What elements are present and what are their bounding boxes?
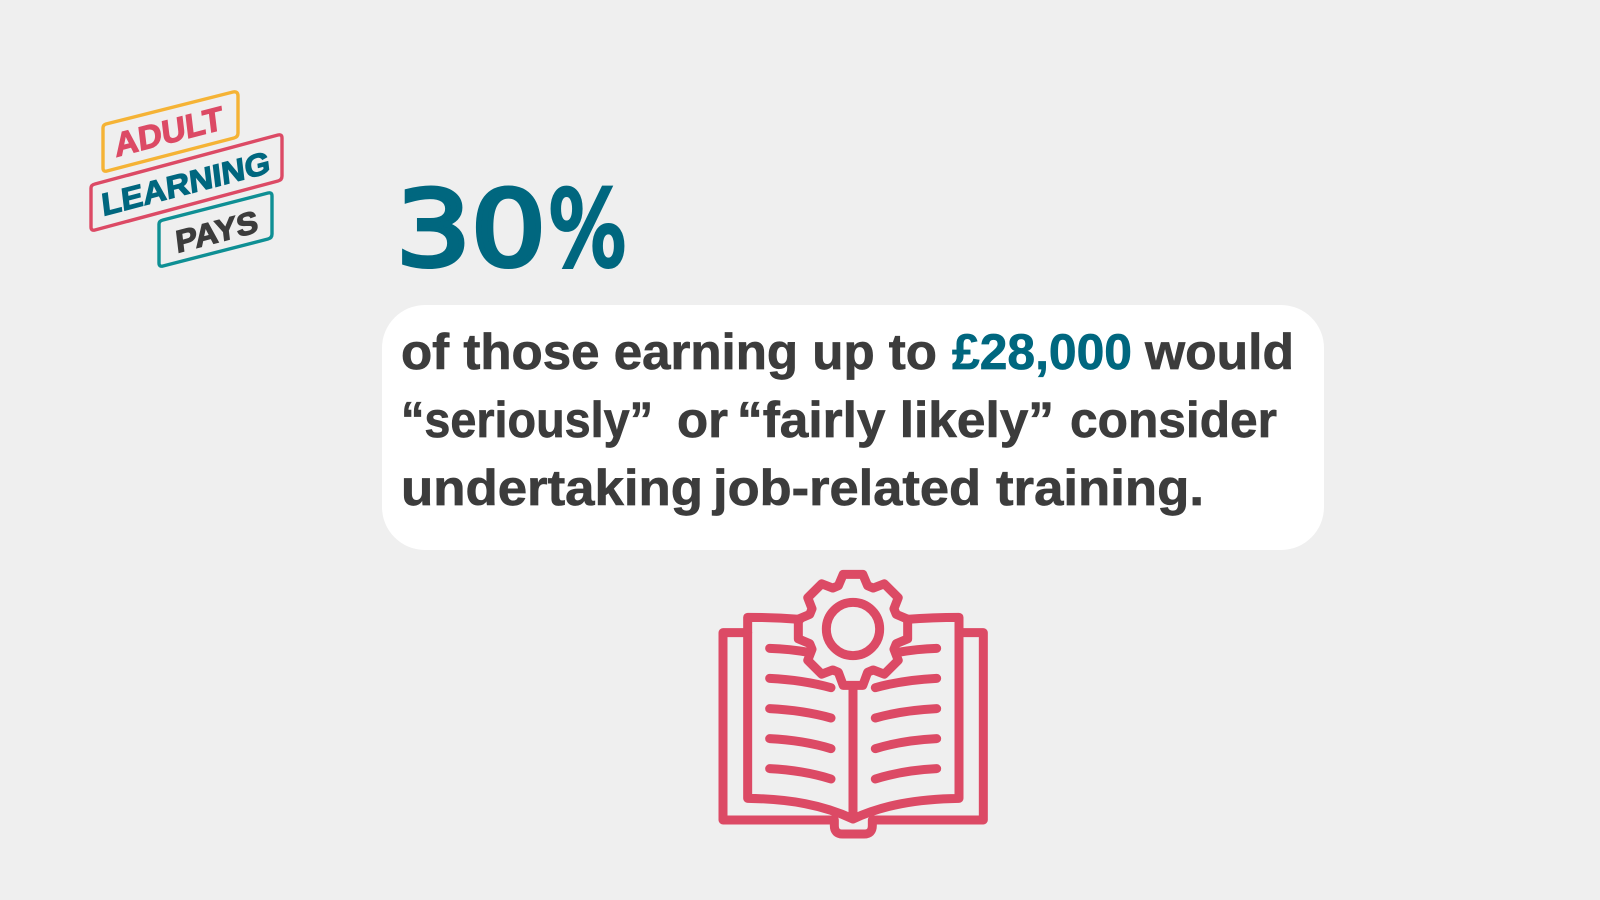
book spine <box>839 686 866 818</box>
description text: “fairly likely” <box>737 392 1054 448</box>
description text <box>401 324 1294 516</box>
description text: undertaking <box>401 460 703 516</box>
description text: or <box>677 392 728 448</box>
logo text: adult: ADULT <box>113 100 225 165</box>
logo: Adult Learning Pays <box>91 92 282 266</box>
description text: consider <box>1070 392 1277 448</box>
description text: would <box>1144 324 1294 380</box>
book cover <box>723 633 983 834</box>
description text: training. <box>996 460 1204 516</box>
panel: description <box>382 305 1324 550</box>
text lines on left page <box>770 648 831 779</box>
headline statistic: 30%: 30 <box>396 170 546 290</box>
description text: £28,000 <box>952 324 1132 380</box>
text lines on right page <box>875 648 937 779</box>
logo box: adult <box>103 92 238 171</box>
logo box: learning <box>91 135 282 230</box>
gear <box>798 574 908 685</box>
logo box: pays <box>159 193 272 266</box>
description text: “seriously” <box>401 392 653 448</box>
headline statistic: 30%: % <box>548 170 627 290</box>
headline statistic: 30% <box>396 170 627 290</box>
description text: of those earning up to <box>401 324 937 380</box>
book pages <box>748 617 959 819</box>
logo text: pays: PAYS <box>174 203 260 260</box>
icon: open book with gear <box>723 574 983 834</box>
logo text: learning: LEARNING <box>100 144 272 223</box>
description text: job-related <box>712 460 981 516</box>
